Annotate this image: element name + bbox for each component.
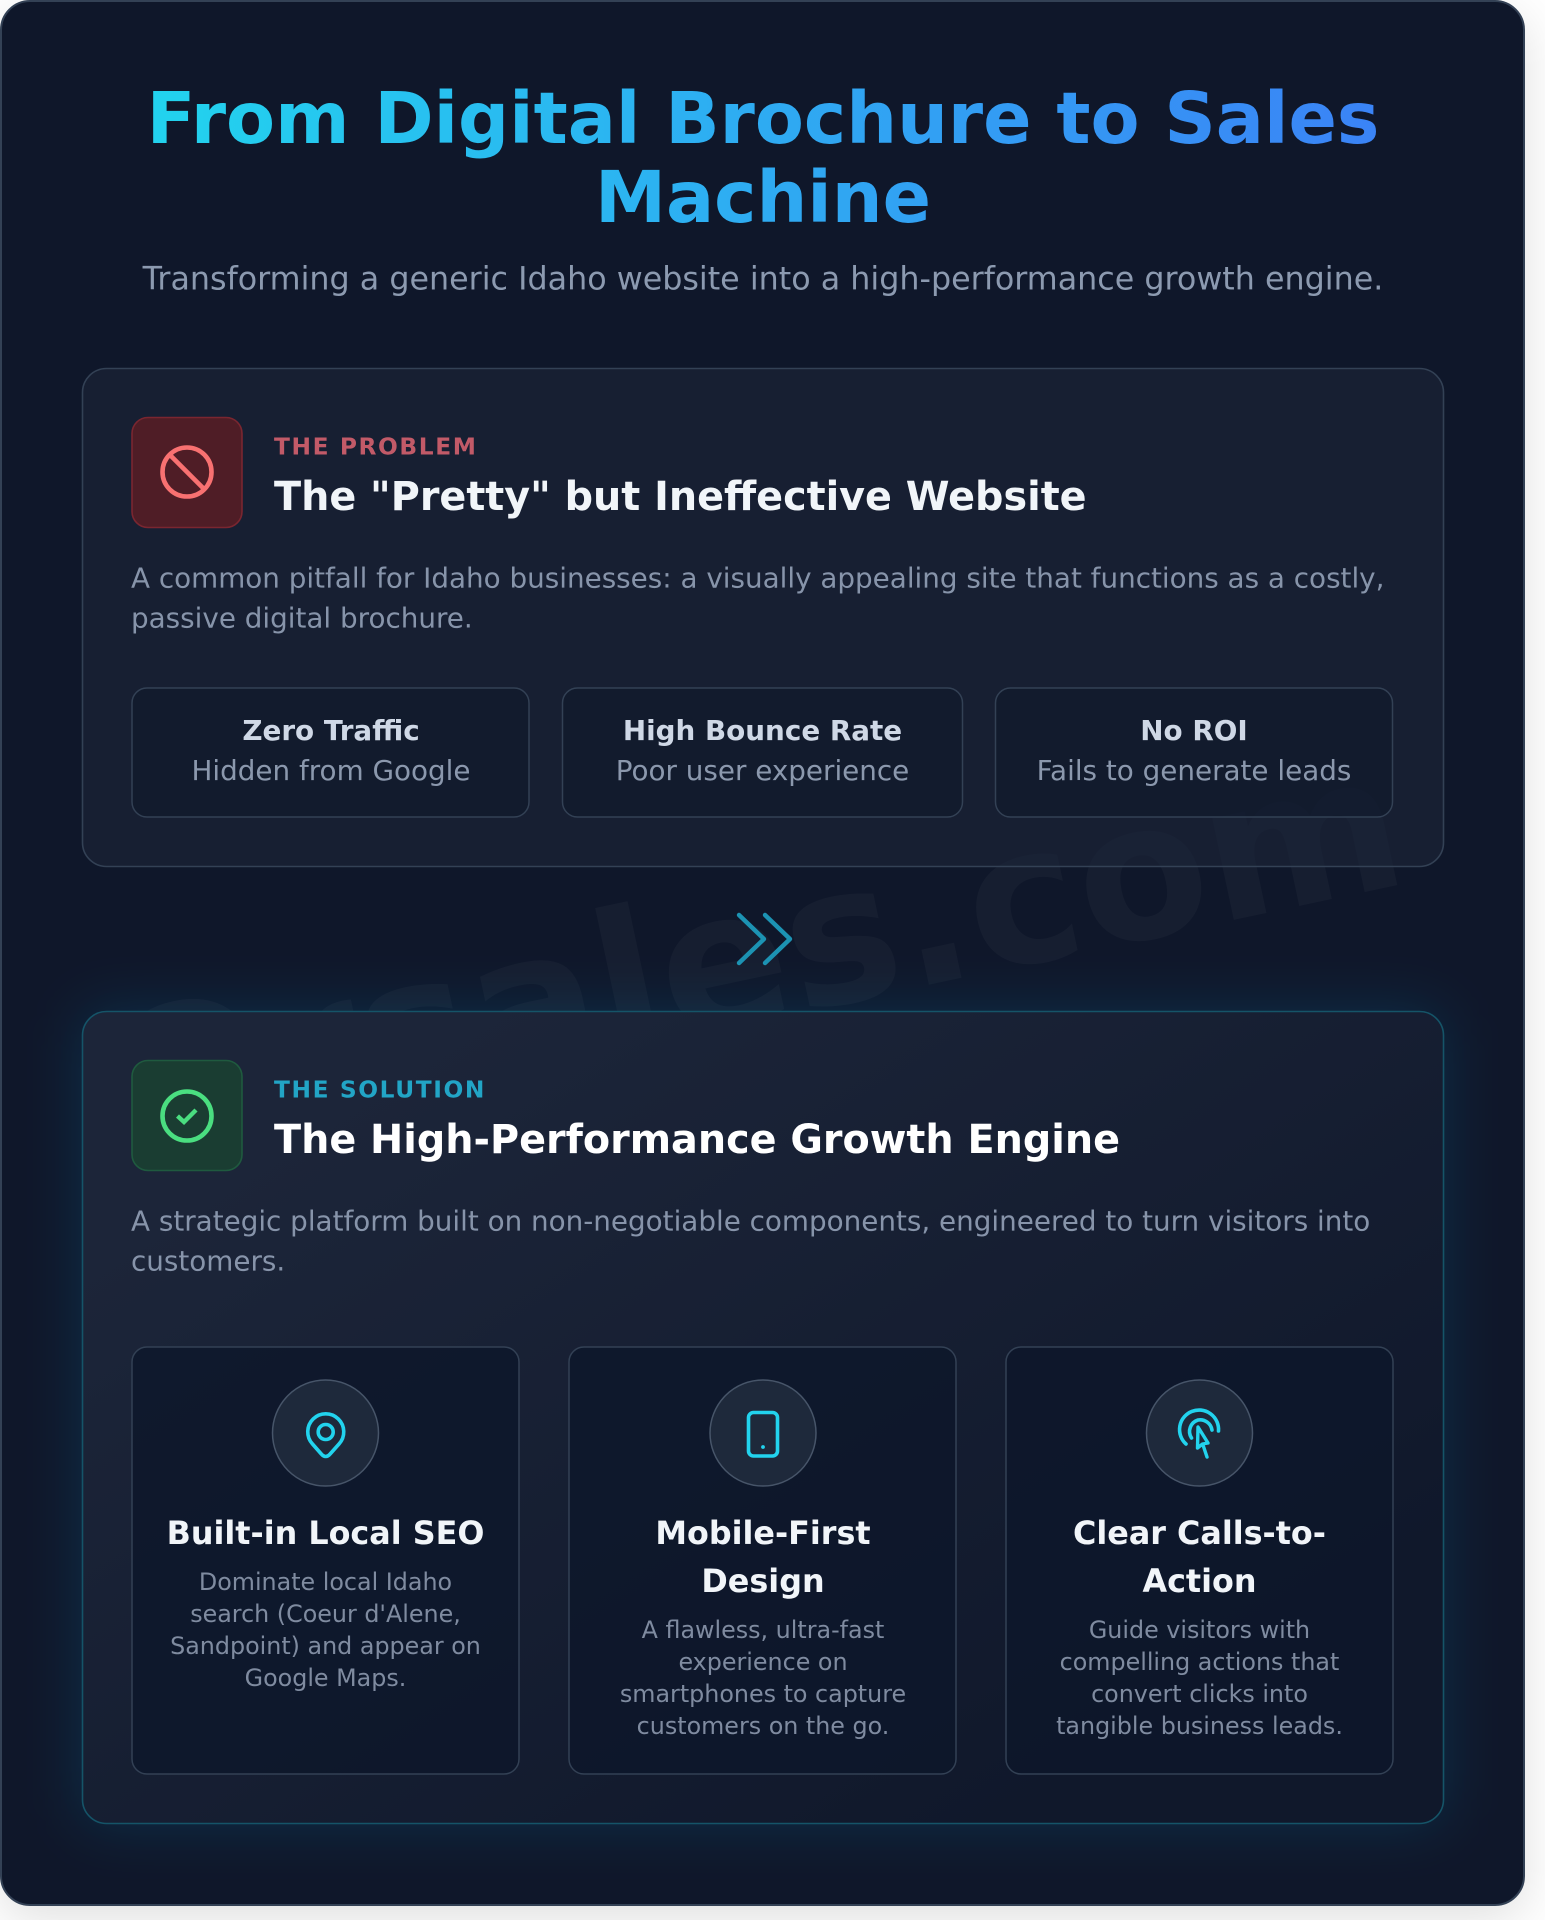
solution panel glow: [82, 1011, 1443, 1824]
problem label: THE PROBLEM: [274, 434, 478, 460]
stat: no roi: No ROI: [1140, 714, 1248, 747]
title: From Digital Brochure to Sales: [147, 77, 1379, 160]
feature: mobile-first design: [569, 1347, 956, 1774]
feature: built-in local seo: search (Coeur d'Alene,: [190, 1600, 461, 1628]
feature: built-in local seo: Sandpoint) and appear on: [170, 1632, 481, 1660]
panel: the solution: [82, 1012, 1444, 1824]
icon: smartphone: [710, 1380, 816, 1486]
solution description: customers.: [131, 1244, 285, 1278]
stat: high bounce rate: Poor user experience: [616, 754, 909, 787]
problem heading: The "Pretty" but Ineffective Website: [274, 474, 1087, 520]
feature: clear calls-to-action: Guide visitors with: [1089, 1616, 1310, 1644]
solution description: A strategic platform built on non-negotiable components, engineered to turn visitors into: [131, 1204, 1370, 1238]
stat: no roi: Fails to generate leads: [1037, 754, 1351, 787]
feature: mobile-first design: Design: [701, 1563, 825, 1600]
stat: zero traffic: Zero Traffic: [242, 714, 420, 747]
icon: cursor click: [1146, 1380, 1252, 1486]
stat: high bounce rate: High Bounce Rate: [623, 714, 902, 747]
feature: clear calls-to-action: convert clicks into: [1091, 1680, 1308, 1708]
problem description: passive digital brochure.: [131, 602, 473, 634]
problem description: [131, 562, 1384, 634]
feature: mobile-first design: smartphones to capture: [620, 1680, 906, 1708]
problem description: A common pitfall for Idaho businesses: a visually appealing site that functions as a costly,: [131, 562, 1384, 594]
feature: clear calls-to-action: Clear Calls-to-: [1073, 1515, 1326, 1552]
icon: prohibited sign: [132, 418, 242, 528]
solution heading: The High-Performance Growth Engine: [274, 1117, 1120, 1163]
feature: mobile-first design: customers on the go.: [637, 1712, 889, 1740]
icon: check circle: [132, 1060, 242, 1170]
feature: built-in local seo: [132, 1347, 519, 1774]
feature: clear calls-to-action: tangible business leads.: [1056, 1712, 1343, 1740]
panel: the problem: [82, 368, 1444, 866]
watermark: Orsales.com: [87, 710, 1421, 1200]
feature: mobile-first design: experience on: [678, 1648, 848, 1676]
feature: built-in local seo: Built-in Local SEO: [167, 1515, 484, 1552]
stat: zero traffic: [132, 688, 529, 817]
feature: clear calls-to-action: Action: [1142, 1563, 1257, 1600]
solution description: [131, 1204, 1370, 1278]
subtitle: Transforming a generic Idaho website into a high-performance growth engine.: [142, 262, 1383, 298]
feature: built-in local seo: Google Maps.: [245, 1664, 406, 1692]
solution label: THE SOLUTION: [274, 1076, 486, 1104]
feature: clear calls-to-action: compelling actions that: [1060, 1648, 1339, 1676]
stat: high bounce rate: [562, 688, 962, 817]
feature: mobile-first design: Mobile-First: [655, 1515, 871, 1552]
feature: built-in local seo: Dominate local Idaho: [199, 1568, 452, 1596]
icon: map pin: [272, 1380, 378, 1486]
title: Machine: [595, 156, 931, 239]
stat: no roi: [996, 688, 1392, 817]
feature: mobile-first design: A flawless, ultra-fast: [642, 1616, 884, 1644]
feature: clear calls-to-action: [1006, 1347, 1393, 1774]
title: [147, 77, 1379, 239]
arrow: double chevron: [739, 915, 790, 963]
stat: zero traffic: Hidden from Google: [191, 754, 471, 787]
